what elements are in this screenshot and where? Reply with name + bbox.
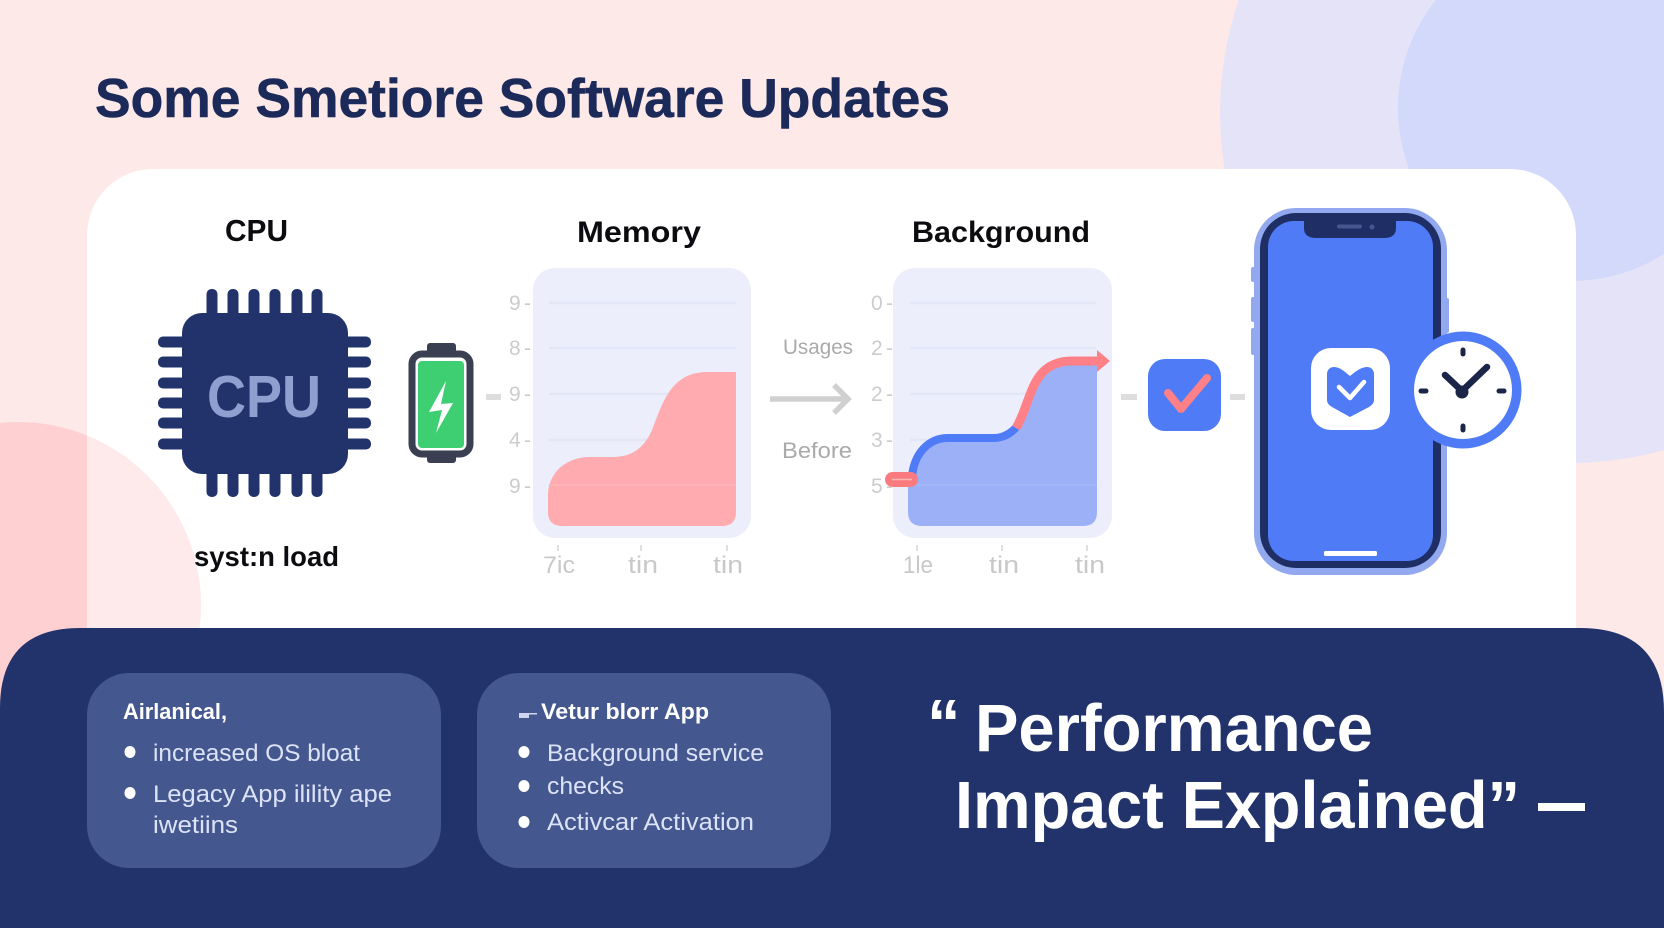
chart: background: 1le: [903, 552, 933, 579]
heading: CPU: CPU: [225, 213, 288, 248]
bullet: background service: Background service: [547, 740, 764, 767]
card 1 heading: Airlanical,: [123, 699, 227, 724]
heading: Background: Background: [912, 216, 1090, 249]
chart: memory: 9-: [509, 475, 531, 498]
chart: background: 5-: [871, 475, 893, 498]
chart: memory: [509, 268, 751, 579]
icon: CPU chip: CPU: [207, 364, 321, 430]
chart: background: 3-: [871, 429, 893, 452]
label: system load: syst:n load: [194, 541, 339, 572]
bullet 2: iwetiins: [153, 812, 238, 839]
chart: background: 0-: [871, 292, 893, 315]
chart: memory: 7ic: [543, 552, 575, 579]
icon: clock: [1404, 332, 1522, 448]
bullet 1: increased OS bloat: [153, 740, 360, 767]
connector dash: [1230, 394, 1245, 400]
quote headline: Impact Explained”: [955, 768, 1520, 843]
icon: battery: [412, 343, 470, 463]
chart: background: tin: [1075, 552, 1105, 579]
bullet 2: [124, 781, 392, 839]
panel: card 2: [477, 673, 831, 868]
quote headline: [927, 686, 1585, 843]
chart: memory: 8-: [509, 337, 531, 360]
heading: Memory: Memory: [577, 216, 701, 249]
bullet: checks: checks: [547, 773, 624, 800]
chart: memory: 9-: [509, 292, 531, 315]
label: before: Before: [782, 438, 852, 463]
chart: background: 2-: [871, 383, 893, 406]
chart: background: tin: [989, 552, 1019, 579]
chart: memory: tin: [713, 552, 743, 579]
chart: memory: tin: [628, 552, 658, 579]
label: usages: Usages: [783, 336, 853, 359]
card 2 heading: Vetur blorr App: [541, 699, 709, 724]
bullet 2: Legacy App ilility ape: [153, 781, 392, 808]
panel: card 1: [87, 673, 441, 868]
arrow: [770, 385, 848, 413]
title: Some Smetiore Software Updates: [95, 67, 950, 129]
panel: bottom band: [0, 628, 1664, 928]
icon: phone: [1251, 208, 1449, 575]
icon: app shield: [1311, 348, 1390, 430]
icon: CPU chip: [158, 289, 371, 497]
panel: metrics card: [87, 169, 1576, 628]
quote headline: “: [927, 686, 960, 761]
chart: memory: 9-: [509, 383, 531, 406]
chart: background: [871, 268, 1112, 579]
bullet: activation: Activcar Activation: [547, 809, 754, 836]
connector dash: [486, 394, 501, 400]
chart: background: 2-: [871, 337, 893, 360]
connector dash: [1121, 394, 1137, 400]
chart: memory: 4-: [509, 429, 531, 452]
icon: check badge: [1148, 359, 1221, 431]
quote headline: Performance: [975, 691, 1373, 766]
